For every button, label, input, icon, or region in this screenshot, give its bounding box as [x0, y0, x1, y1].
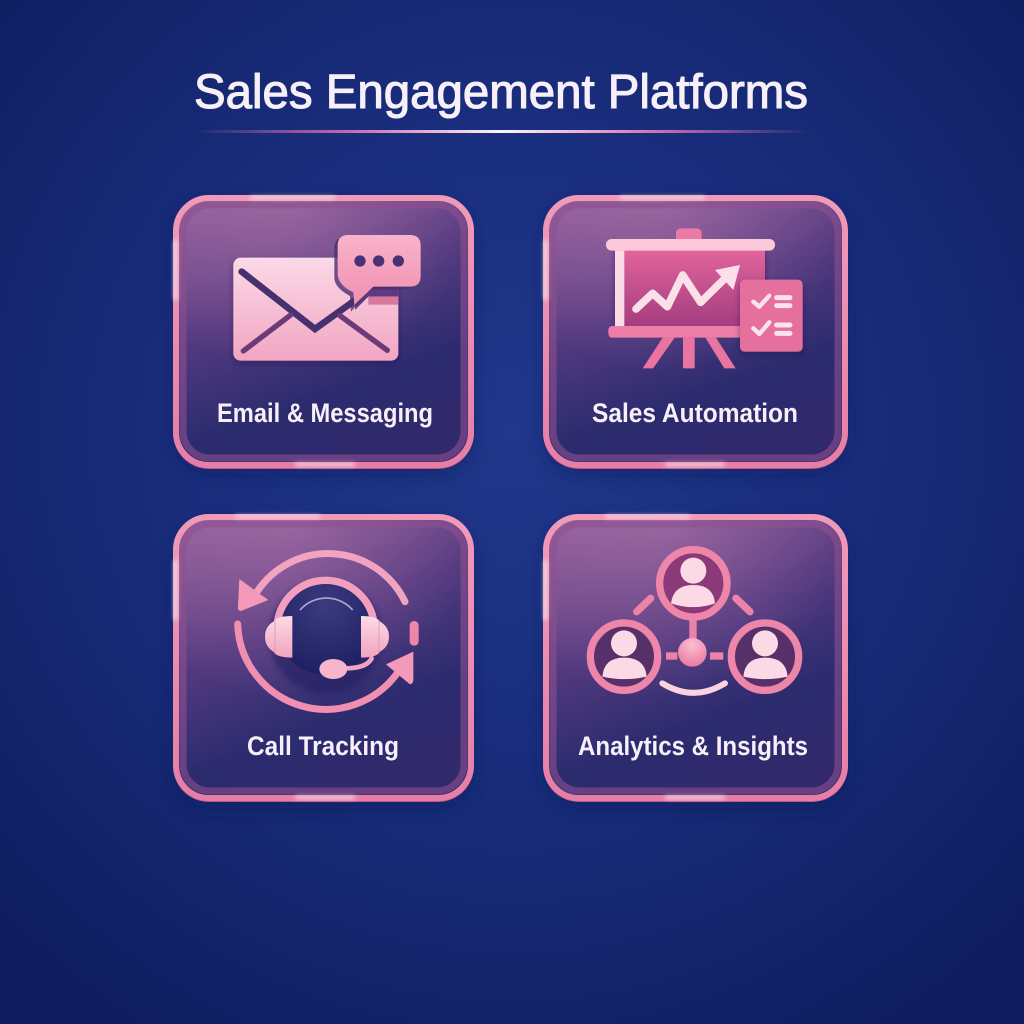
title underline [195, 130, 810, 133]
panel: analytics and insights [543, 515, 848, 808]
card frame [173, 515, 474, 808]
label: call tracking: Call Tracking [247, 731, 399, 761]
label: sales automation: Sales Automation [592, 398, 798, 428]
icon: headset with circular arrows [238, 554, 419, 709]
card frame [173, 196, 474, 474]
card frame [543, 196, 848, 474]
icon: envelope with chat bubble [233, 235, 421, 361]
panel: email and messaging [173, 196, 474, 474]
icon: connected people network [590, 550, 799, 693]
panel: call tracking [173, 515, 474, 808]
label: analytics and insights: Analytics & Insights [578, 731, 808, 761]
panel: sales automation [543, 196, 848, 474]
card frame [543, 515, 848, 808]
icon: presentation board with chart and checklist [606, 228, 803, 368]
title: Sales Engagement Platforms [194, 66, 808, 119]
label: email and messaging: Email & Messaging [217, 398, 433, 428]
